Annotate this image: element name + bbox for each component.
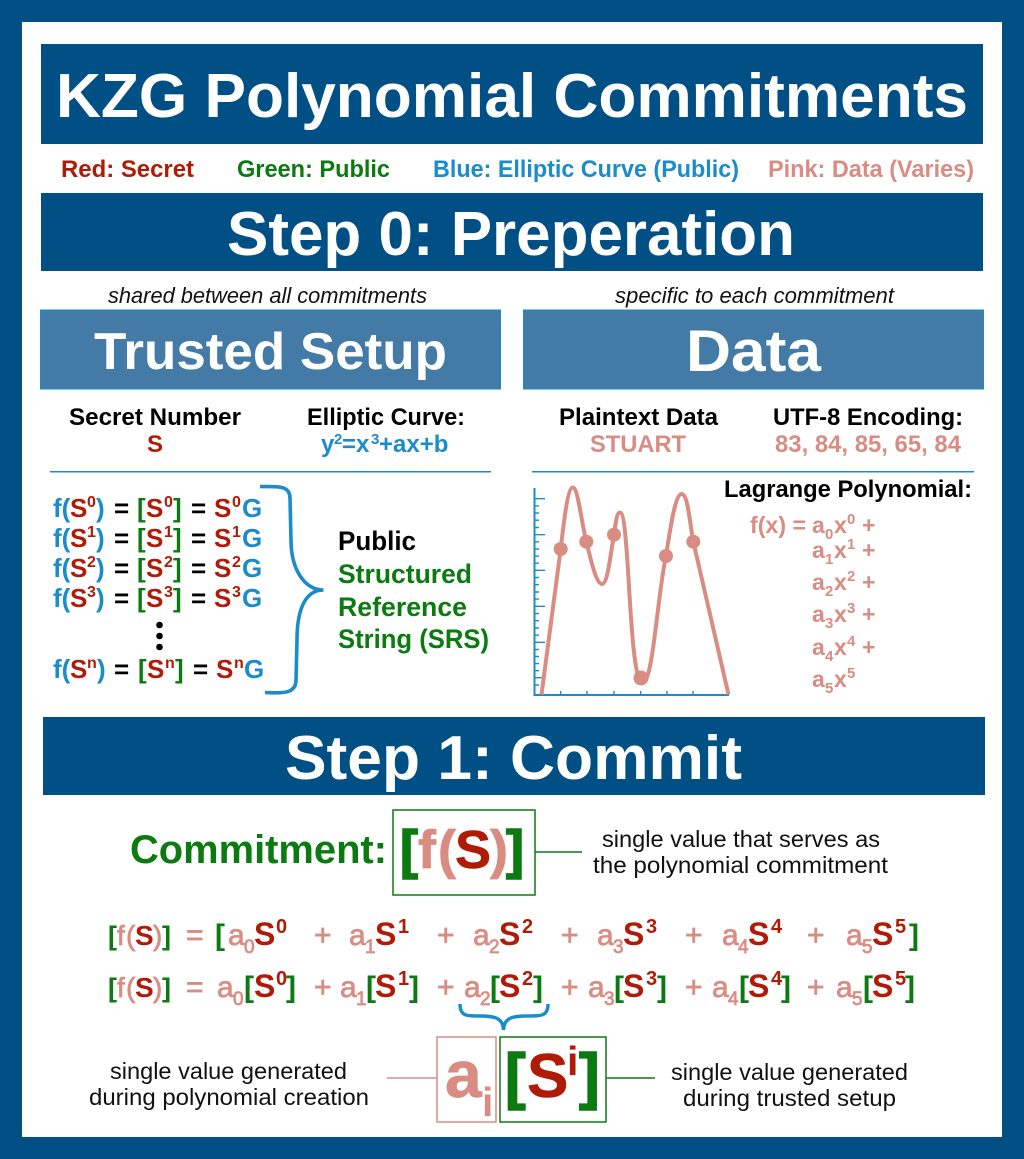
equation 2: f bbox=[117, 972, 125, 1003]
caption: shared: shared between all commitments bbox=[108, 283, 427, 308]
equation 2: ] bbox=[905, 971, 915, 1004]
panel heading: trusted setup bbox=[40, 310, 500, 389]
colour legend: Green: Public bbox=[237, 156, 390, 183]
SRS element box: [ bbox=[505, 1042, 526, 1111]
formula row 3: 3 bbox=[232, 584, 241, 601]
equation 1: f bbox=[117, 920, 125, 951]
heading: step 0: Step 0: Preperation bbox=[227, 200, 795, 269]
lagrange formula: 0 bbox=[825, 526, 833, 543]
formula row 3: 3 bbox=[87, 584, 96, 601]
formula row 0: S bbox=[146, 493, 163, 523]
equation 2: ) bbox=[153, 972, 162, 1003]
equation 1: a bbox=[722, 919, 739, 952]
formula row 0: ) bbox=[96, 493, 105, 523]
equation 2: ( bbox=[126, 972, 136, 1003]
formula row n: = bbox=[114, 654, 129, 684]
formula row 1: G bbox=[242, 523, 262, 553]
equation 2: [ bbox=[244, 971, 254, 1004]
divider bbox=[50, 471, 491, 472]
lagrange formula: a bbox=[812, 512, 825, 538]
formula row 2: S bbox=[146, 553, 163, 583]
formula row 0: [ bbox=[137, 493, 146, 523]
formula row 0: G bbox=[242, 493, 262, 523]
equation 2: [ bbox=[108, 973, 117, 1003]
caption: specific: specific to each commitment bbox=[615, 283, 895, 308]
equation 1: S bbox=[135, 920, 154, 951]
lagrange formula: a bbox=[812, 601, 825, 627]
lagrange formula: a bbox=[812, 569, 825, 595]
formula row n: ) bbox=[97, 654, 106, 684]
commitment box: ( bbox=[438, 820, 456, 880]
formula row 0: 0 bbox=[87, 494, 96, 511]
equation 2: S bbox=[135, 972, 154, 1003]
colour legend bbox=[61, 156, 974, 183]
commitment box: ] bbox=[506, 820, 524, 880]
equation 1: [ bbox=[108, 921, 117, 951]
equation 1: S bbox=[254, 916, 275, 952]
formula row 2: 2 bbox=[232, 554, 241, 571]
lagrange formula bbox=[750, 511, 875, 697]
equation 2: + bbox=[685, 971, 703, 1004]
lagrange formula: 0 bbox=[847, 511, 855, 528]
formula row n: S bbox=[216, 654, 233, 684]
equation 2: ] bbox=[286, 971, 296, 1004]
formula row 2: 2 bbox=[87, 554, 96, 571]
formula row 2: [ bbox=[137, 553, 146, 583]
equation 1: 0 bbox=[276, 916, 287, 938]
heading: step 1: Step 1: Commit bbox=[285, 724, 742, 793]
formula row 2: = bbox=[114, 553, 129, 583]
equation 2: [ bbox=[366, 971, 376, 1004]
formula row 2: ) bbox=[96, 553, 105, 583]
equation 2: [ bbox=[614, 971, 624, 1004]
formula row 0: S bbox=[214, 493, 231, 523]
left note: single value generated bbox=[110, 1058, 347, 1084]
left callout line bbox=[387, 1077, 437, 1079]
equation 1: 1 bbox=[398, 916, 409, 938]
equation 1: S bbox=[623, 916, 644, 952]
formula row 1: [ bbox=[137, 523, 146, 553]
lagrange formula: x bbox=[834, 569, 847, 595]
equation 2: S bbox=[748, 968, 769, 1004]
formula row 2: G bbox=[242, 553, 262, 583]
formula row 0: ] bbox=[173, 493, 182, 523]
equation 2: a bbox=[836, 971, 853, 1004]
equation 2: [ bbox=[739, 971, 749, 1004]
elliptic curve: =x bbox=[342, 431, 370, 458]
lagrange formula: + bbox=[862, 601, 875, 627]
equation 1: S bbox=[499, 916, 520, 952]
elliptic curve: 3 bbox=[371, 431, 379, 448]
formula row 2: S bbox=[214, 553, 231, 583]
equation 1: S bbox=[748, 916, 769, 952]
equation 2: 5 bbox=[895, 968, 906, 990]
elliptic curve: y bbox=[321, 431, 335, 458]
utf-8 encoding: UTF-8 Encoding: bbox=[773, 404, 963, 431]
formula row 2: = bbox=[191, 553, 206, 583]
equation 2: 4 bbox=[771, 968, 783, 990]
right note bbox=[671, 1059, 908, 1111]
formula row n: n bbox=[234, 655, 244, 672]
secret number: S bbox=[147, 431, 163, 458]
commitment label: Commitment: bbox=[130, 828, 387, 872]
equation 1: + bbox=[685, 919, 703, 952]
equation 2: a bbox=[217, 971, 234, 1004]
equation 2: S bbox=[499, 968, 520, 1004]
commitment box: ) bbox=[490, 820, 508, 880]
equation 2: ] bbox=[657, 971, 667, 1004]
lagrange formula: + bbox=[862, 634, 875, 660]
formula row 1: ] bbox=[173, 523, 182, 553]
elliptic curve: Elliptic Curve: bbox=[307, 404, 465, 431]
lagrange formula: x bbox=[834, 634, 847, 660]
SRS label: Structured bbox=[338, 559, 472, 589]
formula row n: S bbox=[147, 654, 164, 684]
SRS label: Reference bbox=[338, 592, 467, 622]
equation 1: 5 bbox=[862, 937, 873, 958]
lagrange formula: + bbox=[862, 569, 875, 595]
equation 1: + bbox=[437, 919, 455, 952]
equation 2: 3 bbox=[604, 989, 615, 1010]
lagrange formula: 4 bbox=[847, 633, 856, 650]
formula row 1: 1 bbox=[164, 524, 173, 541]
SRS element box: S bbox=[527, 1042, 568, 1111]
lagrange formula: 2 bbox=[847, 568, 855, 585]
colour legend: Pink: Data (Varies) bbox=[768, 156, 974, 183]
formula row 2: S bbox=[70, 553, 87, 583]
plaintext data bbox=[559, 404, 719, 458]
lagrange formula: a bbox=[812, 634, 825, 660]
colour legend: Red: Secret bbox=[61, 156, 194, 183]
equation 1: 4 bbox=[738, 937, 749, 958]
equation 1: 0 bbox=[244, 937, 255, 958]
coefficient box: i bbox=[482, 1079, 493, 1125]
formula row 3: ] bbox=[173, 583, 182, 613]
equation 2: 1 bbox=[356, 989, 367, 1010]
commitment note: single value that serves as bbox=[602, 826, 880, 852]
equation 1: ] bbox=[162, 921, 171, 951]
SRS element box: i bbox=[567, 1038, 578, 1084]
formula row 3: = bbox=[114, 583, 129, 613]
commitment box: [ bbox=[400, 820, 418, 880]
panel heading: data bbox=[524, 310, 984, 389]
equation 1: S bbox=[375, 916, 396, 952]
equation 1: 3 bbox=[646, 916, 657, 938]
equation 2: 0 bbox=[276, 968, 287, 990]
equation 1: a bbox=[228, 919, 245, 952]
equation 1: [ bbox=[215, 919, 225, 952]
left note: during polynomial creation bbox=[89, 1084, 369, 1110]
formula row 1: 1 bbox=[87, 524, 96, 541]
formula row 3: S bbox=[146, 583, 163, 613]
colour legend: Blue: Elliptic Curve (Public) bbox=[433, 156, 739, 183]
lagrange formula: 5 bbox=[847, 665, 855, 682]
equation 2: [ bbox=[490, 971, 500, 1004]
formula row 0: 0 bbox=[232, 494, 241, 511]
lagrange formula: 4 bbox=[825, 648, 834, 665]
coefficient box bbox=[437, 1037, 496, 1125]
lagrange formula: x bbox=[834, 666, 847, 692]
lagrange formula: x bbox=[834, 537, 847, 563]
equation 2: ] bbox=[409, 971, 419, 1004]
equation 2: S bbox=[254, 968, 275, 1004]
SRS element box bbox=[500, 1037, 606, 1122]
left note bbox=[89, 1058, 369, 1110]
formula row 2: f( bbox=[53, 553, 71, 583]
formula row n: = bbox=[193, 654, 208, 684]
lagrange formula: a bbox=[812, 666, 825, 692]
right callout line bbox=[606, 1077, 655, 1079]
formula row 0: 0 bbox=[164, 494, 173, 511]
equation 1: + bbox=[314, 919, 332, 952]
lagrange formula: 3 bbox=[825, 615, 833, 632]
equation 1: 1 bbox=[365, 937, 376, 958]
lagrange formula: x bbox=[834, 512, 847, 538]
lagrange formula: a bbox=[812, 537, 825, 563]
equation 2: a bbox=[588, 971, 605, 1004]
lagrange formula: 1 bbox=[847, 536, 855, 553]
right note: during trusted setup bbox=[683, 1085, 896, 1111]
equation 1: a bbox=[473, 919, 490, 952]
formula row 1: 1 bbox=[232, 524, 241, 541]
formula row n: ] bbox=[175, 654, 184, 684]
equation 2: ] bbox=[162, 973, 171, 1003]
equation 2: 3 bbox=[646, 968, 657, 990]
divider bbox=[532, 471, 974, 472]
SRS label: Public bbox=[338, 526, 416, 556]
commitment box bbox=[393, 810, 535, 895]
formula row n: n bbox=[165, 655, 175, 672]
lagrange formula: x bbox=[834, 601, 847, 627]
equation 2: + bbox=[314, 971, 332, 1004]
formula row 2: ] bbox=[173, 553, 182, 583]
equation 1: 3 bbox=[613, 937, 624, 958]
elliptic curve: 2 bbox=[334, 431, 342, 448]
equation 2: a bbox=[712, 971, 729, 1004]
elliptic curve bbox=[307, 404, 465, 458]
equation 1: ) bbox=[153, 920, 162, 951]
formula row n: [ bbox=[138, 654, 147, 684]
formula row 0: = bbox=[114, 493, 129, 523]
equation 2: S bbox=[872, 968, 893, 1004]
equation 2: 0 bbox=[233, 989, 244, 1010]
formula row 1: = bbox=[114, 523, 129, 553]
lagrange formula: 1 bbox=[825, 551, 833, 568]
plaintext data: Plaintext Data bbox=[559, 404, 719, 431]
small curly brace bbox=[460, 1004, 548, 1030]
formula row 3: = bbox=[191, 583, 206, 613]
vertical ellipsis bbox=[156, 622, 163, 650]
formula row 3: f( bbox=[53, 583, 71, 613]
commitment note bbox=[593, 826, 888, 878]
heading: step 0 bbox=[41, 193, 983, 271]
commitment note: the polynomial commitment bbox=[593, 852, 888, 878]
SRS formulas bbox=[53, 493, 264, 684]
equation 1: a bbox=[597, 919, 614, 952]
equation 1: = bbox=[186, 919, 204, 952]
equation 2: + bbox=[561, 971, 579, 1004]
formula row 1: = bbox=[191, 523, 206, 553]
formula row n: n bbox=[87, 655, 97, 672]
utf-8 encoding: 83, 84, 85, 65, 84 bbox=[775, 431, 962, 458]
panel heading: trusted setup: Trusted Setup bbox=[94, 323, 447, 381]
formula row 0: S bbox=[70, 493, 87, 523]
equation 2: + bbox=[437, 971, 455, 1004]
right note: single value generated bbox=[671, 1059, 908, 1085]
plaintext data: STUART bbox=[590, 431, 686, 458]
formula row 3: G bbox=[242, 583, 262, 613]
secret number: Secret Number bbox=[69, 404, 241, 431]
equation 2: S bbox=[623, 968, 644, 1004]
panel heading: data: Data bbox=[686, 319, 822, 384]
formula row 1: S bbox=[70, 523, 87, 553]
formula row 3: [ bbox=[137, 583, 146, 613]
equation 1: 2 bbox=[522, 916, 533, 938]
formula row n: f( bbox=[53, 654, 71, 684]
equation 2: 1 bbox=[398, 968, 409, 990]
lagrange formula: 5 bbox=[825, 680, 833, 697]
elliptic curve: +ax+b bbox=[379, 431, 448, 458]
equation 2: a bbox=[464, 971, 481, 1004]
formula row 3: S bbox=[214, 583, 231, 613]
formula row 1: ) bbox=[96, 523, 105, 553]
commitment callout line bbox=[535, 851, 582, 853]
formula row n: S bbox=[70, 654, 87, 684]
formula row 0: = bbox=[191, 493, 206, 523]
title bbox=[41, 44, 983, 144]
coefficient box: a bbox=[445, 1037, 483, 1111]
lagrange heading: Lagrange Polynomial: bbox=[724, 476, 972, 503]
formula row 3: S bbox=[70, 583, 87, 613]
equation 2: ] bbox=[533, 971, 543, 1004]
equation 1: a bbox=[846, 919, 863, 952]
lagrange formula: + bbox=[862, 512, 875, 538]
equation 2: 5 bbox=[852, 989, 863, 1010]
heading: step 1 bbox=[43, 717, 985, 795]
formula row 2: 2 bbox=[164, 554, 173, 571]
equation 1: ] bbox=[909, 919, 919, 952]
formula row 1: f( bbox=[53, 523, 71, 553]
equation 1: S bbox=[872, 916, 893, 952]
formula row 1: S bbox=[146, 523, 163, 553]
SRS label: String (SRS) bbox=[338, 624, 489, 654]
equation 2: S bbox=[375, 968, 396, 1004]
SRS element box: ] bbox=[579, 1042, 600, 1111]
formula row 3: 3 bbox=[164, 584, 173, 601]
polynomial chart bbox=[534, 488, 729, 695]
commitment box: S bbox=[455, 820, 491, 880]
utf-8 encoding bbox=[773, 404, 963, 458]
formula row 3: ) bbox=[96, 583, 105, 613]
lagrange formula: 2 bbox=[825, 583, 833, 600]
equation 1: ( bbox=[126, 920, 136, 951]
equation 2: a bbox=[340, 971, 357, 1004]
equation 2: + bbox=[807, 971, 825, 1004]
SRS label bbox=[338, 526, 489, 654]
title: KZG Polynomial Commitments bbox=[56, 62, 968, 131]
equation 2: = bbox=[186, 971, 204, 1004]
equation 1: 5 bbox=[895, 916, 906, 938]
lagrange formula: + bbox=[862, 537, 875, 563]
equation 2: 4 bbox=[728, 989, 739, 1010]
equation 2: 2 bbox=[522, 968, 533, 990]
equation 1: 2 bbox=[489, 937, 500, 958]
lagrange formula: f(x) = bbox=[750, 512, 806, 538]
secret number bbox=[69, 404, 241, 458]
equation 1: a bbox=[349, 919, 366, 952]
curly brace bbox=[260, 486, 324, 693]
equation 2: 2 bbox=[480, 989, 491, 1010]
commitment box: f bbox=[418, 820, 437, 880]
formula row 1: S bbox=[214, 523, 231, 553]
formula row 0: f( bbox=[53, 493, 71, 523]
equation 1: + bbox=[807, 919, 825, 952]
lagrange formula: 3 bbox=[847, 600, 855, 617]
equation 1: 4 bbox=[771, 916, 783, 938]
equation 2: [ bbox=[863, 971, 873, 1004]
equation 1: + bbox=[561, 919, 579, 952]
equation 2: ] bbox=[781, 971, 791, 1004]
formula row n: G bbox=[244, 654, 264, 684]
